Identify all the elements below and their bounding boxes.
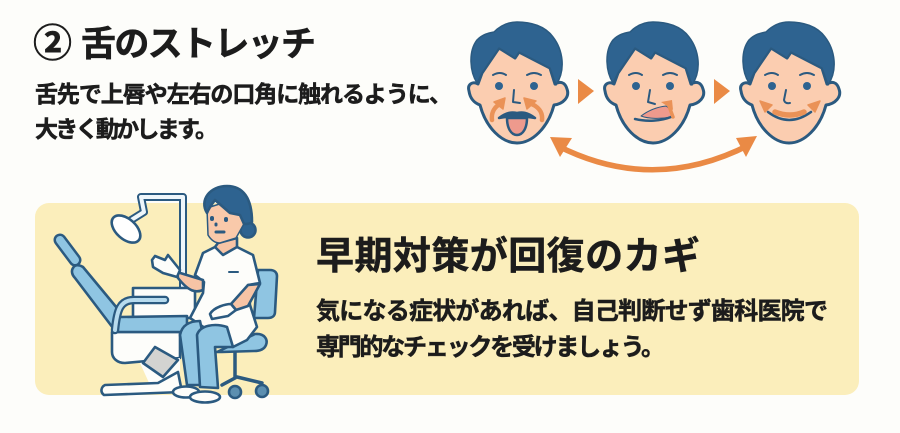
arrow: double-headed return arc [550,136,757,170]
icon: smiling face with stretched mouth corners [741,22,840,143]
chair floor plate [101,372,182,395]
uniform [190,247,260,347]
heading: early treatment is key: 早期対策が回復のカギ [316,236,700,278]
nose [214,224,218,225]
side tray [133,288,195,318]
raised forearm [177,272,203,291]
footrest support [140,358,180,390]
hair bun [240,222,256,238]
front shoe [190,392,220,402]
arrow: step one to two [578,79,594,104]
armrest [115,300,165,330]
illustration: dental hygienist beside dental chair [60,186,277,402]
stool backrest [254,270,277,318]
icon: face with tongue licking lip [605,22,704,143]
text block: early treatment advice: 気になる症状があれば、自己判断せず歯科医院で [316,297,828,325]
back leg [180,321,205,385]
icon: face with tongue out [469,22,568,143]
panel: early treatment callout [35,203,859,395]
text block: early treatment advice: 専門的なチェックを受けましょう。 [316,334,665,361]
backrest [72,265,117,328]
chair seat [113,316,187,332]
face [207,200,245,243]
stool post and casters [222,350,262,385]
dental lamp [107,210,145,248]
mouth [216,230,224,234]
rear shoe [173,386,199,398]
text block: tongue stretch instructions: 大きく動かします。 [35,116,218,142]
headrest [60,240,75,260]
footrest [143,347,178,377]
raised glove [152,255,180,277]
lowered glove [210,304,236,319]
front leg [197,325,233,388]
eyes [212,218,226,220]
lamp arm highlight [128,197,183,288]
heading: tongue stretch: ② [33,23,72,66]
hair [204,186,252,224]
armrest highlight [115,300,165,330]
neck [215,238,237,255]
chair base [112,332,180,363]
stool seat [217,334,267,352]
lamp arm [128,197,183,288]
uniform pocket mark [229,271,238,273]
lowered forearm [231,284,260,310]
arrow: step two to three [714,79,730,104]
front caster [229,386,241,398]
text block: tongue stretch instructions: 舌先で上唇や左右の口角に触れるように、 [35,81,452,107]
heading: tongue stretch: 舌のストレッチ [81,25,316,64]
rear caster [256,385,268,397]
